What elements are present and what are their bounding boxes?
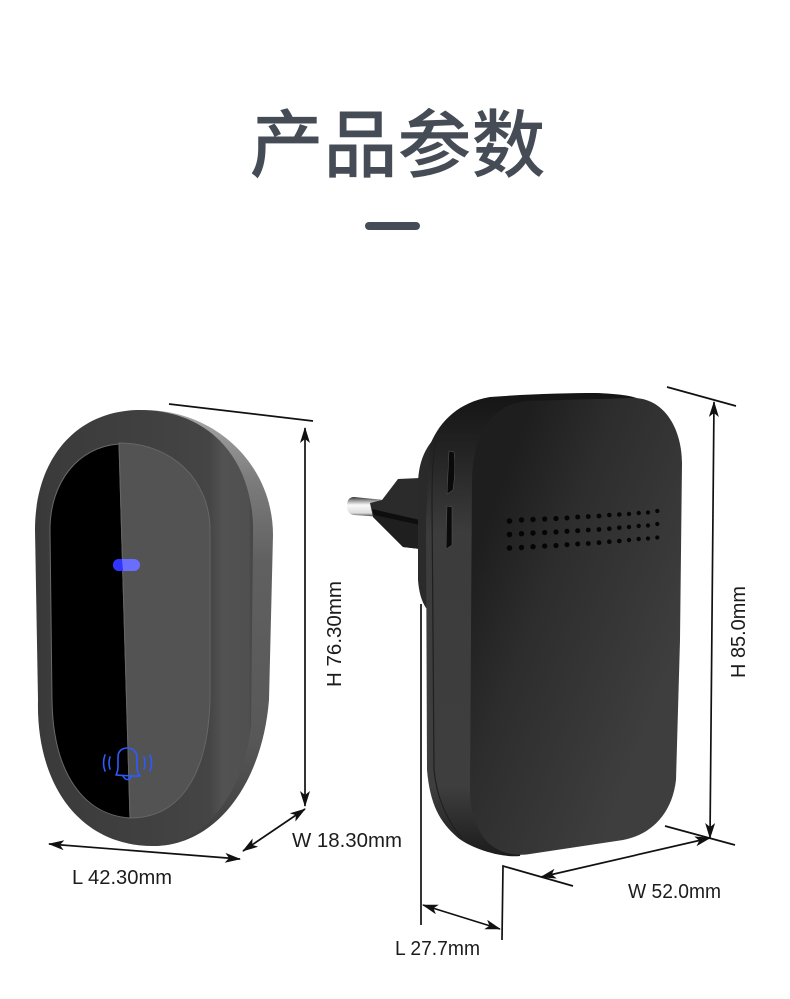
length arrow bbox=[49, 844, 240, 859]
height label: H 76.30mm bbox=[324, 581, 346, 687]
title underline bbox=[365, 222, 420, 230]
plug lower edge bbox=[373, 512, 420, 549]
dimensions: door button bbox=[49, 404, 402, 889]
LED indicator bbox=[113, 559, 140, 571]
dimensions: receiver bbox=[395, 387, 750, 960]
height reference line bbox=[169, 404, 313, 421]
height label: H 85.0mm bbox=[728, 586, 750, 678]
device: door button bbox=[35, 410, 273, 846]
width label: W 52.0mm bbox=[628, 881, 721, 903]
depth label: L 27.7mm bbox=[395, 938, 480, 960]
button glass panel: grey part bbox=[119, 443, 210, 818]
button side wall bbox=[140, 410, 273, 846]
button front bezel bbox=[35, 410, 253, 846]
plug body bbox=[370, 478, 420, 549]
title: 产品参数 bbox=[250, 104, 546, 187]
device: plug-in receiver bbox=[347, 393, 682, 856]
receiver front face bbox=[470, 398, 682, 855]
plug pin bbox=[347, 497, 384, 517]
top reference line bbox=[667, 387, 736, 406]
side seam bbox=[432, 440, 462, 838]
bottom reference line bbox=[665, 826, 735, 845]
receiver side body bbox=[426, 393, 640, 856]
icon: bell bbox=[104, 748, 152, 780]
side buttons bbox=[446, 451, 455, 549]
width arrow bbox=[243, 809, 305, 851]
plug base bbox=[418, 440, 436, 610]
depth reference lines bbox=[502, 866, 573, 940]
depth arrow bbox=[423, 905, 500, 929]
width label: W 18.30mm bbox=[292, 830, 402, 852]
height arrow bbox=[710, 402, 714, 838]
length label: L 42.30mm bbox=[72, 867, 172, 889]
speaker grille bbox=[507, 509, 659, 551]
width arrow bbox=[541, 838, 710, 877]
height arrow bbox=[304, 428, 306, 806]
button glass panel: black part bbox=[50, 444, 130, 818]
